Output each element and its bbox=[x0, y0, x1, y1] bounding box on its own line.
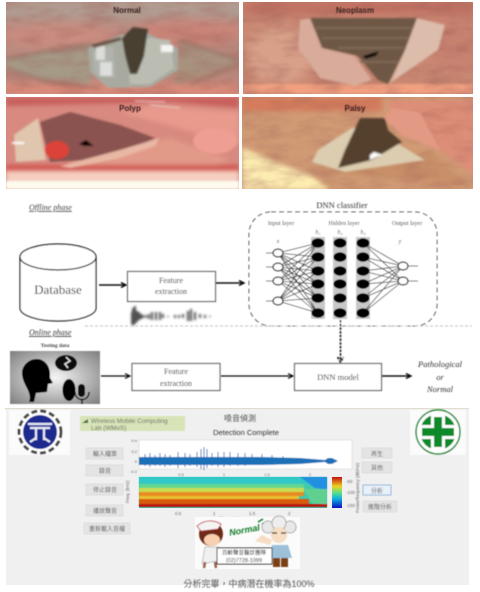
spectrogram axis labels: -50 bbox=[346, 479, 353, 484]
label: Neoplasm: Neoplasm bbox=[336, 6, 374, 15]
box: DNN model bbox=[294, 364, 382, 390]
layer labels: Hidden layer bbox=[328, 221, 360, 227]
heading: offline phase: Offline phase bbox=[29, 203, 72, 212]
photo: neoplasm bbox=[243, 0, 480, 94]
spectrogram bbox=[139, 477, 327, 508]
divider: phases bbox=[85, 325, 472, 327]
spectrogram axis labels: -100 bbox=[346, 490, 356, 495]
spectrogram axis labels: 1.5 bbox=[249, 511, 256, 516]
box: feature extraction offline: extraction bbox=[155, 287, 187, 296]
waveform chart: 1.5 bbox=[264, 472, 271, 477]
buttons left: 播放聲音 bbox=[93, 507, 117, 515]
label: testing data: Testing data bbox=[41, 343, 70, 349]
spectrogram axis labels: 1 bbox=[213, 511, 216, 516]
image: speaker and microphone bbox=[10, 351, 100, 404]
layer labels: x bbox=[276, 239, 280, 245]
box: feature extraction online: Feature bbox=[164, 367, 188, 376]
arrow: feature extraction to classifier bbox=[216, 280, 244, 286]
panel: detection app screenshot bbox=[5, 408, 469, 589]
photo: palsy bbox=[242, 97, 480, 190]
cartoon: nurse and doctor: Normal bbox=[228, 522, 261, 538]
spectrogram axis labels bbox=[125, 462, 360, 523]
status: detection complete: Detection Complete bbox=[213, 428, 279, 437]
buttons right: 分析 bbox=[371, 487, 383, 495]
label: Normal: Normal bbox=[113, 6, 141, 15]
logo: green cross bbox=[410, 410, 466, 455]
heading: DNN classifier: DNN classifier bbox=[316, 200, 368, 210]
buttons left: 停止錄音 bbox=[93, 486, 117, 494]
box: feature extraction offline bbox=[128, 272, 216, 302]
box: feature extraction online: extraction bbox=[160, 379, 192, 388]
waveform chart: 0.2 bbox=[131, 449, 138, 454]
app title: 嗓音偵測 bbox=[224, 413, 256, 423]
layer labels: Output layer bbox=[392, 221, 422, 227]
result text: or bbox=[436, 372, 444, 382]
photo: normal vocal folds bbox=[0, 0, 245, 96]
lab badge: Wireless Mobile Computing bbox=[91, 418, 168, 425]
lab badge bbox=[80, 416, 185, 432]
layer labels: h₂ bbox=[337, 230, 343, 236]
result text: Normal bbox=[426, 384, 454, 394]
arrow: DNN model to result bbox=[382, 374, 411, 378]
DNN classifier dashed frame bbox=[249, 212, 437, 326]
panel: DNN pipeline diagram bbox=[10, 200, 472, 404]
heading: online phase: Online phase bbox=[29, 328, 72, 337]
neural network bbox=[266, 237, 418, 319]
buttons left bbox=[84, 448, 130, 534]
cartoon: nurse and doctor bbox=[195, 516, 300, 569]
arrow: database to feature extraction bbox=[99, 282, 126, 288]
result text: Pathological bbox=[417, 359, 463, 369]
result text bbox=[417, 359, 463, 394]
cartoon: nurse and doctor: 百齡聲音醫診團隊 bbox=[222, 548, 266, 556]
cartoon: nurse and doctor: (02)7728-1099 bbox=[226, 558, 262, 564]
database cylinder bbox=[20, 244, 96, 321]
buttons left: 錄音 bbox=[99, 467, 111, 475]
buttons right: 進階分析 bbox=[368, 503, 392, 511]
database cylinder: Database bbox=[34, 282, 82, 297]
waveform chart: 0 bbox=[135, 459, 138, 464]
box: feature extraction offline: Feature bbox=[159, 276, 183, 285]
buttons left: 輸入檔案 bbox=[93, 450, 117, 458]
result message: 分析完畢，中病潛在機率為100% bbox=[183, 578, 315, 589]
waveform chart: 1 bbox=[223, 472, 226, 477]
waveform chart bbox=[130, 438, 352, 477]
waveform chart: 2 bbox=[309, 472, 312, 477]
colorbar bbox=[332, 477, 342, 508]
buttons right bbox=[362, 448, 397, 512]
spectrogram axis labels: -150 bbox=[346, 503, 356, 508]
spectrogram axis labels: Power/frequency (dB/Hz) bbox=[355, 462, 360, 513]
panel: laryngoscopy photos bbox=[0, 0, 480, 190]
photo: polyp bbox=[6, 97, 239, 189]
waveform chart: -0.2 bbox=[130, 469, 138, 474]
arrow: feature extraction to DNN model bbox=[221, 374, 293, 378]
layer labels bbox=[268, 221, 422, 245]
waveform chart: 0.5 bbox=[178, 472, 185, 477]
label: Polyp: Polyp bbox=[119, 104, 141, 113]
layer labels: Input layer bbox=[268, 221, 294, 227]
waveform bbox=[132, 306, 210, 326]
lab badge: Lab (WMoS) bbox=[91, 425, 126, 432]
arrow: testing data to feature extraction bbox=[101, 374, 130, 378]
layer labels: h₁ bbox=[315, 230, 321, 236]
spectrogram axis labels: 2 bbox=[288, 511, 291, 516]
spectrogram axis labels: Freq. (kHz) bbox=[125, 480, 130, 503]
waveform chart: 0.4 bbox=[131, 438, 138, 443]
spectrogram axis labels: Time (s) bbox=[219, 517, 239, 523]
spectrogram axis labels: 0.5 bbox=[175, 511, 182, 516]
box: DNN model: DNN model bbox=[317, 372, 360, 382]
buttons right: 其他 bbox=[371, 464, 383, 472]
buttons left: 重新載入音檔 bbox=[89, 525, 125, 533]
arrow: classifier to DNN model dashed bbox=[338, 320, 344, 362]
box: feature extraction online bbox=[132, 364, 220, 390]
layer labels: h₃ bbox=[360, 230, 366, 236]
buttons right: 再生 bbox=[371, 450, 383, 458]
layer labels: y bbox=[398, 239, 402, 245]
logo: university seal bbox=[9, 410, 70, 455]
label: Palsy: Palsy bbox=[345, 104, 366, 113]
